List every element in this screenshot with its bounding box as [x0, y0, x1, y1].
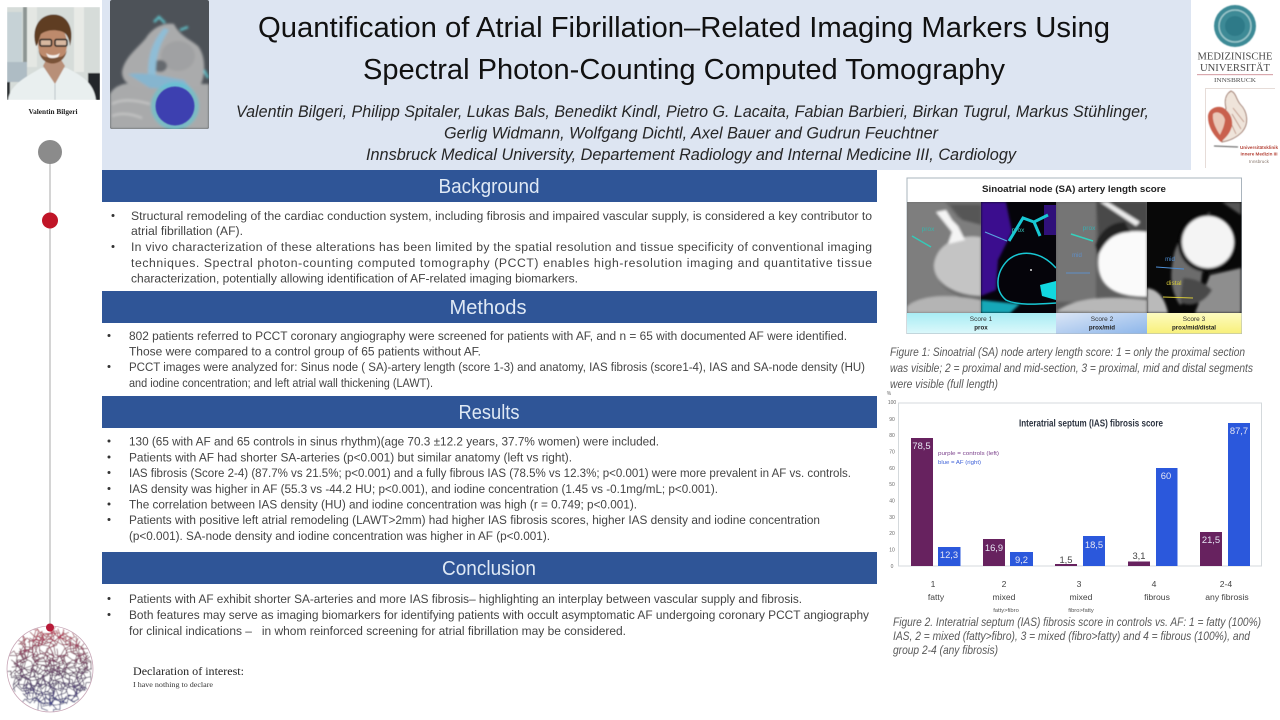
y axis: 50 [889, 482, 895, 488]
figure 1 caption [890, 346, 1253, 391]
chart legend: purple = controls (left) [938, 451, 999, 457]
results text [108, 434, 851, 543]
CT panel: score 3: mid [1165, 257, 1175, 263]
grey timeline dot [38, 140, 62, 164]
bar values: 78,5 [912, 440, 931, 451]
results text: 130 (65 with AF and 65 controls in sinus rhythm)(age 70.3 ±12.2 years, 37.7% women) were included. [129, 434, 659, 448]
methods text: Those were compared to a control group of 65 patients without AF. [129, 344, 481, 358]
conclusion text [108, 592, 870, 638]
panel: conclusion [102, 552, 877, 638]
y axis: 10 [889, 548, 895, 554]
category labels: 2 [1002, 579, 1007, 589]
category labels: 4 [1152, 579, 1157, 589]
logo: Medizinische Universität Innsbruck [1197, 5, 1273, 84]
y axis: 20 [889, 531, 895, 537]
conclusion text: Patients with AF exhibit shorter SA-arteries and more IAS fibrosis– highlighting an interplay between vascular supply and fibrosis. [129, 592, 802, 606]
CT panel: score 2: mid [1072, 253, 1082, 259]
heading: methods [102, 291, 877, 323]
category labels: fatty>fibro [993, 608, 1019, 614]
background text: atrial fibrillation (AF). [131, 224, 243, 238]
logo: Medizinische Universität Innsbruck: INNSBRUCK [1214, 78, 1257, 84]
conclusion text: Both features may serve as imaging biomarkers for identifying patients with occult asymptomatic AF undergoing coronary PCCT angiography [129, 608, 870, 622]
score labels: prox [974, 324, 988, 332]
bar values: 1,5 [1059, 554, 1073, 565]
results text: IAS density was higher in AF (55.3 vs -44.2 HU; p<0.001), and iodine concentration (1.45 vs -0.1mg/mL; p<0.001). [129, 482, 718, 496]
results text: Patients with AF had shorter SA-arteries (p<0.001) but similar anatomy (left vs right). [129, 450, 572, 464]
CT panel: score 2: prox [1083, 225, 1096, 232]
score labels [907, 313, 1242, 334]
logo: Medizinische Universität Innsbruck: UNIVERSITÄT [1200, 62, 1271, 74]
bar values: 87,7 [1230, 425, 1248, 436]
background text: characterization, potentially allowing identification of AF-related imaging biomarkers. [131, 272, 578, 286]
authors and affiliation: Valentin Bilgeri, Philipp Spitaler, Lukas Bals, Benedikt Kindl, Pietro G. Lacaita, Fabian Barbieri, Birkan Tugrul, Markus Stühlinger, [236, 102, 1149, 121]
heading: conclusion [102, 552, 877, 584]
methods text: and iodine concentration; and left atrial wall thickening (LAWT). [129, 376, 433, 390]
CT panel: score 1: prox [922, 226, 935, 233]
y axis: 80 [889, 433, 895, 439]
score labels: prox/mid/distal [1172, 324, 1216, 332]
red timeline dot [42, 212, 58, 228]
category labels: 2-4 [1220, 579, 1232, 589]
y axis: 30 [889, 515, 895, 521]
y axis: 40 [889, 498, 895, 504]
score labels: Score 2 [1091, 316, 1114, 323]
y axis: % [887, 391, 892, 397]
portrait photo [7, 7, 100, 100]
color-map panel: score 1 [981, 202, 1056, 313]
background text [112, 209, 872, 286]
methods text: PCCT images were analyzed for: Sinus node ( SA)-artery length (score 1-3) and anatomy, IAS fibrosis (score1-4), IAS and SA-node density (HU) [129, 360, 865, 374]
score labels: prox/mid [1089, 324, 1115, 332]
title [258, 12, 1110, 86]
category labels: fibro>fatty [1068, 608, 1094, 614]
bar values: 3,1 [1132, 550, 1146, 561]
background text: Structural remodeling of the cardiac conduction system, including fibrosis and impaired vascular supply, is considered a key contributor to [131, 209, 872, 223]
y axis: 100 [888, 400, 896, 406]
declaration of interest [133, 664, 244, 689]
blue vessel lumen [156, 86, 194, 126]
score labels: Score 1 [970, 316, 993, 323]
conclusion text: for clinical indications – in whom reinforced screening for atrial fibrillation may be considered. [129, 624, 626, 638]
chart legend [938, 451, 999, 466]
heading: conclusion: Conclusion [442, 558, 536, 580]
figure 2: IAS fibrosis bar chart [887, 391, 1262, 614]
portrait name: Valentin Bilgeri [28, 107, 78, 116]
methods text [108, 329, 865, 390]
timeline with markers [38, 140, 62, 625]
results text: IAS fibrosis (Score 2-4) (87.7% vs 21.5%; p<0.001) and a fully fibrous IAS (78.5% vs 12.3%; p<0.001) were more prevalent in AF vs. controls. [129, 466, 851, 480]
declaration of interest: I have nothing to declare [133, 680, 214, 689]
heading: results: Results [458, 402, 520, 424]
logo: Medizinische Universität Innsbruck: MEDIZINISCHE [1198, 52, 1272, 62]
score labels: Score 3 [1183, 316, 1206, 323]
category labels: 1 [931, 579, 936, 589]
bar values: 60 [1161, 470, 1171, 481]
bars [911, 423, 1250, 566]
logo: heart illustration, Universitätsklinik Innere Medizin III [1205, 88, 1278, 168]
logo: heart illustration, Universitätsklinik Innere Medizin III: Innere Medizin III [1240, 152, 1278, 156]
category labels: fibrous [1144, 592, 1170, 602]
chart title: Interatrial septum (IAS) fibrosis score [1019, 418, 1163, 430]
CT panel: score 1 [907, 202, 981, 313]
figure 1 caption: were visible (full length) [890, 378, 998, 391]
bar values: 12,3 [940, 549, 958, 560]
CT panel: score 2 [1056, 202, 1147, 313]
panel: background [102, 170, 877, 286]
heading: methods: Methods [450, 297, 526, 319]
figure 2 caption [893, 616, 1261, 657]
sphere top node [46, 624, 54, 632]
bar values: 18,5 [1085, 539, 1103, 550]
vascular sphere illustration [6, 624, 94, 712]
category labels: mixed [993, 592, 1016, 602]
title: Quantification of Atrial Fibrillation–Related Imaging Markers Using [258, 12, 1110, 44]
heading: background [102, 170, 877, 202]
y axis: 0 [891, 564, 894, 570]
y axis: 60 [889, 466, 895, 472]
chart legend: blue = AF (right) [938, 460, 981, 466]
category labels: any fibrosis [1205, 592, 1249, 602]
figure 2 caption: group 2-4 (any fibrosis) [893, 644, 998, 657]
category labels: fatty [928, 592, 945, 602]
color-map panel: score 1: prox [1012, 227, 1025, 234]
declaration of interest: Declaration of interest: [133, 664, 244, 678]
y axis [887, 391, 896, 570]
category labels: 3 [1077, 579, 1082, 589]
results text: Patients with positive left atrial remodeling (LAWT>2mm) had higher IAS fibrosis scores, higher IAS density and iodine concentration [129, 513, 820, 527]
bar values: 9,2 [1015, 554, 1028, 565]
bar values: 16,9 [985, 542, 1003, 553]
category labels [928, 579, 1249, 614]
methods text: 802 patients referred to PCCT coronary angiography were screened for patients with AF, and n = 65 with documented AF were identified. [129, 329, 847, 343]
figure 1: SA artery length score [907, 178, 1242, 334]
authors and affiliation [236, 102, 1149, 164]
bar values: 21,5 [1202, 534, 1220, 545]
heading: background: Background [438, 176, 540, 198]
results text: The correlation between IAS density (HU) and iodine concentration was high (r = 0.749; p<0.001). [129, 498, 637, 512]
header band [102, 0, 1191, 170]
y axis: 70 [889, 450, 895, 456]
background text: techniques. Spectral photon-counting computed tomography (PCCT) enables high-resolution imaging and quantitative tissue [131, 256, 872, 270]
CT panel: score 3: distal [1166, 280, 1182, 287]
authors and affiliation: Gerlig Widmann, Wolfgang Dichtl, Axel Bauer and Gudrun Feuchtner [444, 124, 939, 142]
results text: (p<0.001). SA-node density and iodine concentration was higher in AF (p<0.001). [129, 529, 550, 543]
category labels: mixed [1070, 592, 1093, 602]
panel: results [102, 396, 877, 543]
y axis: 90 [889, 417, 895, 423]
logo: heart illustration, Universitätsklinik Innere Medizin III: Innsbruck [1249, 159, 1270, 164]
logo: heart illustration, Universitätsklinik Innere Medizin III: Universitätsklinik [1240, 145, 1278, 150]
heading: results [102, 396, 877, 428]
figure 1: SA artery length score: Sinoatrial node (SA) artery length score [982, 184, 1166, 194]
bar values [912, 425, 1248, 565]
authors and affiliation: Innsbruck Medical University, Departement Radiology and Internal Medicine III, Cardiology [366, 145, 1017, 164]
background text: In vivo characterization of these alterations has been limited by the spatial resolution and tissue specificity of conventional imaging [131, 240, 872, 254]
CT panel: score 3 [1147, 202, 1242, 313]
title: Spectral Photon-Counting Computed Tomography [363, 54, 1006, 86]
3D cardiac CT rendering [110, 0, 209, 130]
panel: methods [102, 291, 877, 390]
